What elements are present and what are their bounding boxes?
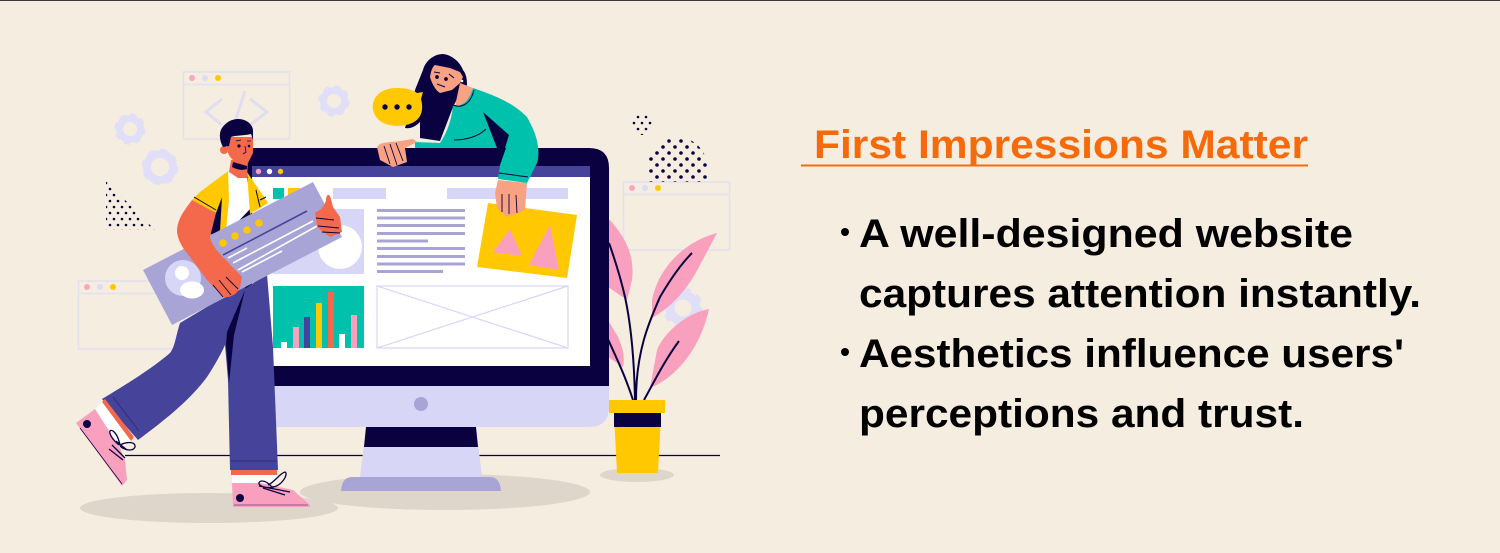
yellow card [477,203,577,278]
sweater shadow [483,112,509,148]
back leg cuff line [113,397,139,431]
front shoe [231,470,310,507]
dotted triangle [106,181,155,230]
gear 3 [320,87,348,115]
jacket details [194,190,266,210]
jacket [192,171,229,231]
monitor [235,148,609,491]
face [430,65,463,93]
stand base [341,477,501,491]
bezel [235,148,609,386]
stems [607,243,692,400]
hair [220,119,253,147]
back shoe [76,399,135,486]
bullet 2: perceptions and trust. [859,392,1304,436]
front cuff [231,460,277,462]
window: code [184,72,290,139]
plant [605,215,717,473]
face details [236,140,251,154]
window: left [78,281,184,349]
beard [232,162,247,170]
nav widgets [273,188,568,199]
neck [455,83,473,106]
sweater [415,88,538,183]
bullet 2: Aesthetics influence users' [859,332,1404,376]
torso shadow [205,197,222,235]
gear 4 [665,290,701,326]
review lines [223,211,317,272]
ground shadows [80,468,674,523]
face details [434,72,463,87]
thumbs up hand [315,195,342,237]
gear 1 [116,115,144,143]
review card [143,182,342,325]
ground line [125,454,720,456]
woman [373,54,577,278]
power dot [414,397,428,411]
dotted half circle [647,137,707,182]
wireframe box [377,286,568,348]
bullet 2 [841,332,1404,436]
bullet list [841,212,1421,436]
sweater details [453,90,528,177]
holding hand lines [213,277,238,297]
back leg [102,283,247,440]
left hand [377,139,417,167]
bullet 1 [841,212,1421,316]
title: First Impressions Matter [814,123,1308,167]
shirt [222,172,252,232]
right hand [495,180,527,217]
leg shadow [226,290,245,383]
man [76,119,342,507]
bullet 1: A well-designed website [859,212,1353,256]
image placeholder [273,209,364,274]
browser bar [252,166,590,177]
stand [360,427,482,477]
window: right [624,182,730,250]
leaves [605,215,717,388]
stars [219,219,263,247]
screen [252,177,590,366]
text lines [377,209,465,273]
bar chart [273,286,364,348]
front leg [225,274,278,470]
pot [609,400,665,473]
hair [405,54,467,141]
background decorations [78,72,730,349]
dotted small circle [631,113,653,135]
speech bubble [373,88,423,126]
chin [235,386,609,427]
neck [229,160,248,178]
jacket right [247,172,268,214]
gear 2 [144,150,176,184]
bullet 1: captures attention instantly. [859,272,1421,316]
face [227,137,253,165]
avatar [165,260,204,298]
ear [220,146,228,154]
arm [177,200,242,297]
